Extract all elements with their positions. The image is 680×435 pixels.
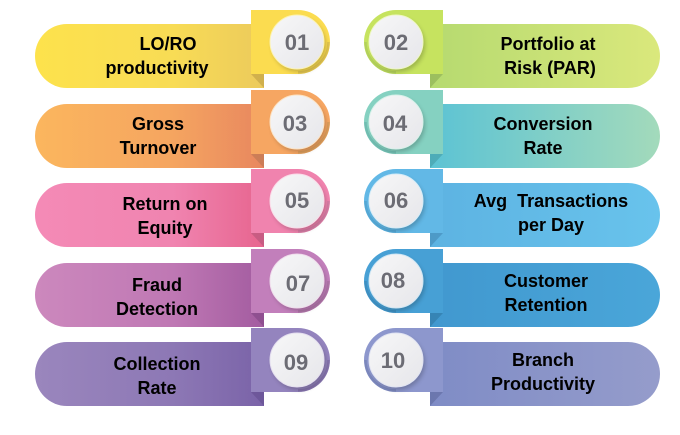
- ribbon 10: 10: [381, 348, 405, 373]
- ribbon 08: Retention: [504, 295, 588, 315]
- ribbon 04: Conversion: [493, 114, 593, 134]
- ribbon 07: Detection: [116, 299, 198, 319]
- ribbon 04: [364, 90, 660, 168]
- ribbon 03: 03: [283, 111, 307, 136]
- ribbon 01: productivity: [105, 58, 209, 78]
- ribbon 08: Customer: [504, 271, 588, 291]
- ribbon 02: Portfolio at: [500, 34, 596, 54]
- ribbon 04: 04: [383, 111, 408, 136]
- ribbon 05: 05: [285, 188, 309, 213]
- ribbon 07: 07: [286, 271, 310, 296]
- ribbon 02: 02: [384, 30, 408, 55]
- ribbon 03: [35, 90, 330, 168]
- ribbon 03: Gross: [132, 114, 184, 134]
- ribbon 09: Collection: [113, 354, 201, 374]
- ribbon 02: Risk (PAR): [504, 58, 596, 78]
- ribbon 03: Turnover: [120, 138, 196, 158]
- ribbon 06: [364, 169, 660, 247]
- ribbon 01: 01: [285, 30, 309, 55]
- ribbon 01: LO/RO: [140, 34, 196, 54]
- ribbon 05: [35, 169, 330, 247]
- ribbon 09: [35, 328, 330, 406]
- ribbon 06: Avg Transactions: [474, 191, 628, 211]
- ribbon 08: 08: [381, 268, 405, 293]
- ribbon 06: 06: [384, 188, 408, 213]
- ribbon 06: per Day: [518, 215, 584, 235]
- ribbon 04: Rate: [523, 138, 563, 158]
- ribbon 07: [35, 249, 330, 327]
- ribbon 01: [35, 10, 330, 88]
- ribbon 05: Equity: [137, 218, 193, 238]
- ribbon 10: Branch: [512, 350, 574, 370]
- ribbon 05: Return on: [122, 194, 208, 214]
- ribbon 10: Productivity: [491, 374, 595, 394]
- ribbon 09: Rate: [137, 378, 177, 398]
- ribbon 07: Fraud: [132, 275, 182, 295]
- ribbon 10: [364, 328, 660, 406]
- ribbon 09: 09: [284, 350, 308, 375]
- ribbon 08: [364, 249, 660, 327]
- ribbon 02: [364, 10, 660, 88]
